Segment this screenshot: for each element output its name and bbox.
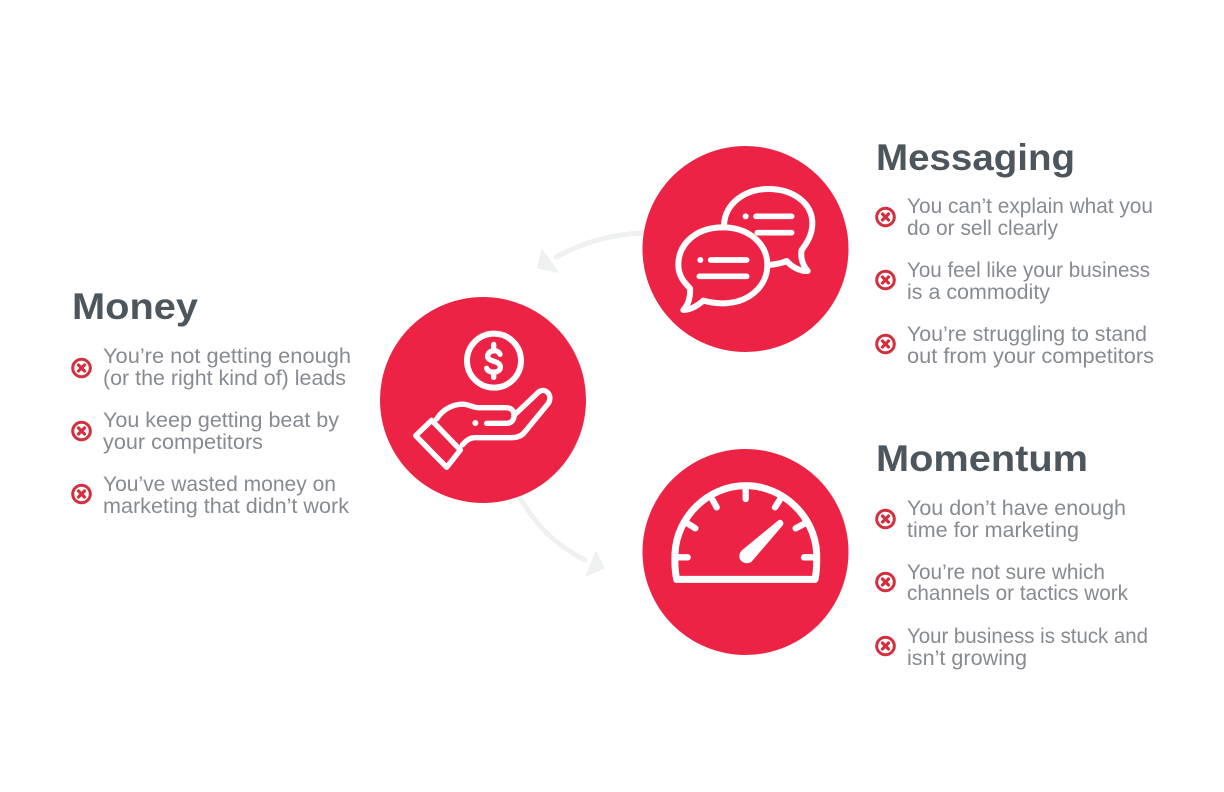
item: wasted money: You’ve wasted money on	[103, 472, 336, 496]
item: not enough leads: You’re not getting enough	[103, 344, 351, 368]
item: which channels: channels or tactics work	[907, 581, 1128, 605]
item: beat by competitors	[73, 408, 339, 454]
panel: momentum	[876, 438, 1148, 670]
item: no time	[877, 496, 1126, 542]
item: can't explain: do or sell clearly	[907, 216, 1058, 240]
item: can't explain	[877, 194, 1153, 240]
panel: messaging	[876, 137, 1154, 368]
item: commodity	[877, 258, 1150, 304]
heading: money: Money	[72, 286, 198, 327]
circle icon: momentum speedometer	[642, 449, 848, 655]
heading: messaging: Messaging	[876, 137, 1075, 178]
heading: momentum: Momentum	[876, 438, 1088, 479]
item: which channels: You’re not sure which	[907, 560, 1105, 584]
panel: money	[72, 286, 351, 518]
item: stuck: Your business is stuck and	[907, 624, 1148, 648]
item: beat by competitors: your competitors	[103, 430, 263, 454]
item: stuck: isn’t growing	[907, 646, 1027, 670]
item: wasted money	[73, 472, 349, 518]
item: commodity: You feel like your business	[907, 258, 1150, 282]
item: can't explain: You can’t explain what you	[907, 194, 1153, 218]
item: wasted money: marketing that didn’t work	[103, 494, 349, 518]
arrow: money to momentum	[520, 498, 604, 576]
item: not enough leads: (or the right kind of) leads	[103, 366, 346, 390]
item: no time: You don’t have enough	[907, 496, 1126, 520]
item: beat by competitors: You keep getting beat by	[103, 408, 339, 432]
item: no time: time for marketing	[907, 518, 1079, 542]
circle icon: money hand	[380, 297, 586, 503]
item: stand out	[877, 322, 1154, 368]
item: not enough leads	[73, 344, 351, 390]
item: stand out: You’re struggling to stand	[907, 322, 1147, 346]
item: stand out: out from your competitors	[907, 344, 1154, 368]
circle icon: messaging chat bubbles	[642, 146, 848, 352]
item: commodity: is a commodity	[907, 280, 1050, 304]
item: which channels	[877, 560, 1128, 605]
arrow: messaging to money	[538, 233, 643, 272]
item: stuck	[877, 624, 1148, 670]
